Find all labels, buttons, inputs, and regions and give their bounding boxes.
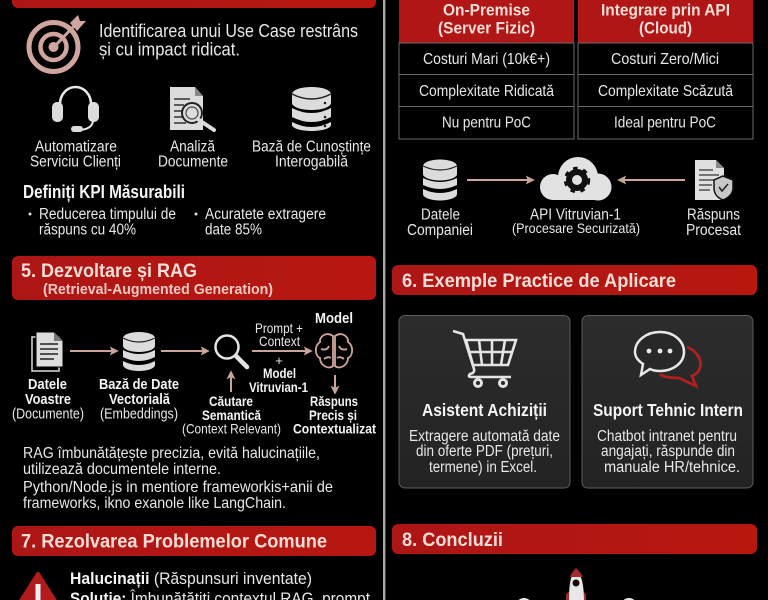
arrow: down to answer <box>334 375 336 393</box>
use case labels: Automatizare <box>35 138 117 156</box>
prompt plus context label: Context <box>259 333 300 349</box>
column divider <box>383 0 385 600</box>
flow labels: Procesat <box>686 222 742 239</box>
card text: angajați, răspunde din <box>601 443 735 460</box>
table rows: Costuri Mari (10k€+) <box>423 51 550 68</box>
icon: warning triangle <box>14 574 62 600</box>
prompt plus context label <box>249 320 308 395</box>
table rows: Ideal pentru PoC <box>614 114 716 132</box>
RAG description <box>23 445 333 512</box>
icon: shopping cart <box>453 331 516 386</box>
icon: document with shield <box>695 160 733 200</box>
prompt plus context label: Model <box>263 366 296 381</box>
table header: API integration: Integrare prin API <box>601 0 730 20</box>
RAG description: utilizează documentele interne. <box>23 461 221 478</box>
arrow: data to API <box>467 179 533 181</box>
table rows: Complexitate Scăzută <box>598 83 733 100</box>
card text <box>597 428 740 476</box>
prompt plus context label: Prompt + <box>255 320 303 336</box>
arrow: up to magnifier <box>230 372 232 392</box>
flow labels: Răspuns <box>687 206 740 224</box>
RAG description: RAG îmbunătățește precizia, evită halucinațiile, <box>23 445 320 462</box>
panel: deployment comparison table <box>399 0 753 239</box>
label: semantic search: (Context Relevant) <box>182 420 281 436</box>
use case text <box>99 20 358 60</box>
label: semantic search: Căutare <box>209 393 253 409</box>
panel: 7. common problems <box>12 526 376 600</box>
KPI bullets: Reducerea timpului de <box>39 206 176 223</box>
label: vector database: (Embeddings) <box>100 406 178 422</box>
arrow: response to API <box>619 179 685 181</box>
table header: API integration: (Cloud) <box>639 18 692 38</box>
table header: on-premise <box>399 0 574 43</box>
section 6 banner: 6. Exemple Practice de Aplicare <box>402 270 676 292</box>
section banner (cropped) <box>12 0 376 8</box>
icon: rocket <box>566 568 586 600</box>
icon: magnifier <box>216 336 247 367</box>
section 5 banner <box>12 256 376 300</box>
icon: database <box>292 87 331 131</box>
label: precise answer <box>293 393 376 436</box>
label: precise answer: Precis și <box>309 407 357 423</box>
card: procurement assistant <box>399 316 570 488</box>
icon: company database <box>423 160 457 201</box>
arrow: vector DB to search <box>161 350 208 352</box>
section 5 banner: (Retrieval-Augmented Generation) <box>43 281 273 298</box>
hallucination text: Halucinații (Răspunsuri inventate) <box>70 569 312 588</box>
flow labels: (Procesare Securizată) <box>512 220 640 236</box>
use case text: Identificarea unui Use Case restrâns <box>99 20 358 41</box>
label: vector database: Bază de Date <box>99 376 179 393</box>
flow labels: API Vitruvian-1 <box>530 206 621 224</box>
label: your data: Datele <box>28 376 67 393</box>
table header: API integration <box>578 0 753 43</box>
table header: on-premise: (Server Fizic) <box>438 18 535 38</box>
panel: use case (left top) <box>12 0 376 238</box>
model heading: Model <box>315 311 353 327</box>
flow labels: Datele <box>421 206 460 224</box>
label: precise answer: Răspuns <box>310 393 358 409</box>
label: your data: (Documente) <box>12 406 84 422</box>
icon: cloud with gear <box>540 157 612 200</box>
card text: termene) in Excel. <box>429 459 537 476</box>
card text: Chatbot intranet pentru <box>597 428 737 445</box>
arrow: documents to vector DB <box>70 350 117 352</box>
icon: headset <box>52 87 99 132</box>
card text <box>409 428 560 476</box>
KPI heading: Definiți KPI Măsurabili <box>23 182 185 202</box>
section 7 banner: 7. Rezolvarea Problemelor Comune <box>21 530 327 552</box>
label: vector database: Vectorială <box>109 391 171 408</box>
use case labels: Bază de Cunoștințe <box>252 138 371 156</box>
label: your data: Voastre <box>25 391 71 408</box>
section 6 banner <box>392 265 757 295</box>
KPI bullets <box>28 206 326 238</box>
card: internal tech support <box>582 316 753 488</box>
card title: Suport Tehnic Intern <box>593 400 743 420</box>
icon: chat bubbles <box>635 332 700 386</box>
use case labels: Serviciu Clienți <box>30 154 121 170</box>
label: semantic search <box>182 393 281 436</box>
section 7 banner <box>12 526 376 556</box>
icon: brain <box>316 334 352 367</box>
icon: target with arrow <box>29 15 86 72</box>
icon: right circle <box>621 598 637 600</box>
panel: 6. practical examples <box>392 265 757 488</box>
icon: stacked documents <box>32 332 63 371</box>
use case labels: Interogabilă <box>275 154 348 170</box>
arrow: search to model <box>252 350 311 352</box>
KPI bullets: răspuns cu 40% <box>39 222 136 238</box>
icon: document with magnifier <box>170 87 214 130</box>
section 5 banner: 5. Dezvoltare și RAG <box>21 260 197 282</box>
use case text: și cu impact ridicat. <box>99 38 240 60</box>
table rows: Costuri Zero/Mici <box>611 51 719 68</box>
table header: on-premise: On-Premise <box>443 0 530 20</box>
hallucination text <box>70 569 370 600</box>
icon: vector database <box>123 332 155 371</box>
use case labels <box>30 138 371 170</box>
panel: 5. development and RAG <box>12 256 376 512</box>
label: semantic search: Semantică <box>202 407 261 423</box>
RAG description: Python/Node.js in mentiore frameworkis+anii de <box>23 479 333 496</box>
table rows: Nu pentru PoC <box>442 114 531 132</box>
label: vector database <box>99 376 179 422</box>
prompt plus context label: Vitruvian-1 <box>249 380 308 395</box>
panel: 8. conclusions <box>392 524 757 600</box>
flow labels: Companiei <box>407 222 473 239</box>
table rows: Complexitate Ridicată <box>419 83 554 100</box>
label: precise answer: Contextualizat <box>293 420 376 436</box>
use case labels: Analiză <box>170 138 215 156</box>
prompt plus context label: + <box>275 353 283 368</box>
card text: manuale HR/tehnice. <box>604 459 740 476</box>
card text: Extragere automată date <box>409 428 560 445</box>
use case labels: Documente <box>158 154 228 170</box>
label: your data <box>12 376 84 422</box>
KPI bullets: Acuratete extragere <box>205 206 326 223</box>
KPI bullets: date 85% <box>205 222 262 238</box>
icon: left circle <box>516 598 532 600</box>
section 8 banner <box>392 524 757 554</box>
table rows <box>399 43 753 139</box>
RAG description: frameworks, ikno exanole like LangChain. <box>23 495 286 512</box>
flow labels <box>407 206 742 239</box>
card title: Asistent Achiziții <box>422 400 547 420</box>
section 8 banner: 8. Concluzii <box>402 529 503 551</box>
card text: din oferte PDF (prețuri, <box>416 443 553 460</box>
